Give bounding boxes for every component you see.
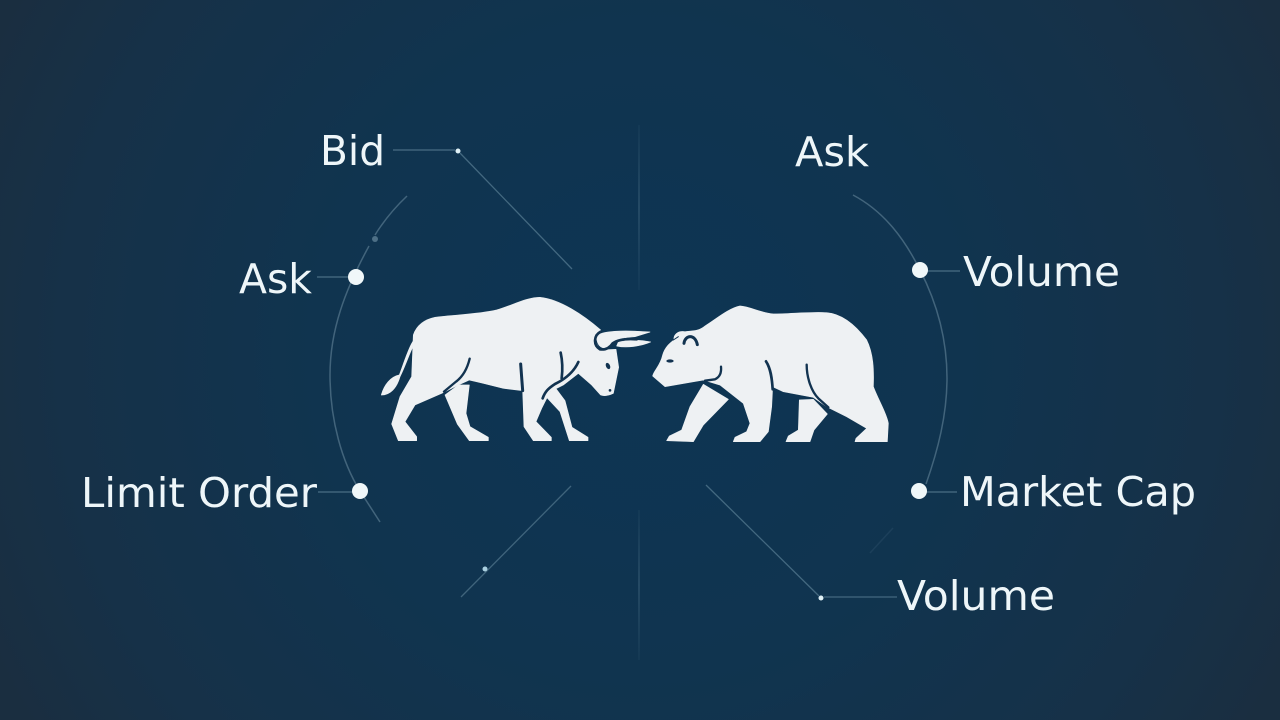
label: Ask left: Ask [239, 255, 312, 303]
center vertical divider top [638, 125, 640, 290]
bear far front leg [667, 384, 728, 442]
label: Volume lower: Volume [897, 572, 1055, 620]
bull horn [597, 331, 650, 348]
left arc [330, 196, 407, 522]
bull nostril [609, 389, 611, 392]
connector: Bid [393, 148, 572, 269]
bull far hind leg [445, 385, 488, 441]
bull far front leg [546, 387, 588, 441]
connector: Volume upper [912, 262, 960, 278]
bull tail [381, 331, 423, 395]
bear muscle lines [673, 337, 828, 407]
connector: Ask left [317, 236, 378, 285]
center vertical divider bottom [638, 510, 640, 660]
label: Limit Order: Limit Order [81, 469, 317, 517]
icon: bull [381, 297, 651, 441]
connector: Volume lower [706, 485, 897, 600]
bear body [653, 306, 888, 442]
bear far hind leg [786, 399, 827, 442]
icon: bear [653, 306, 888, 442]
bull muscle lines [444, 332, 637, 398]
connector: lower left [461, 486, 571, 597]
label: Bid: Bid [320, 127, 385, 175]
bull eye [605, 362, 611, 370]
label: Market Cap: Market Cap [960, 468, 1196, 516]
right arc [853, 195, 947, 553]
connector: Market Cap [911, 483, 957, 499]
label: Volume upper: Volume [963, 248, 1120, 296]
connector: Limit Order [318, 483, 368, 499]
label: Ask right: Ask [795, 128, 869, 176]
bear eye [666, 359, 674, 363]
bull body [392, 297, 619, 441]
